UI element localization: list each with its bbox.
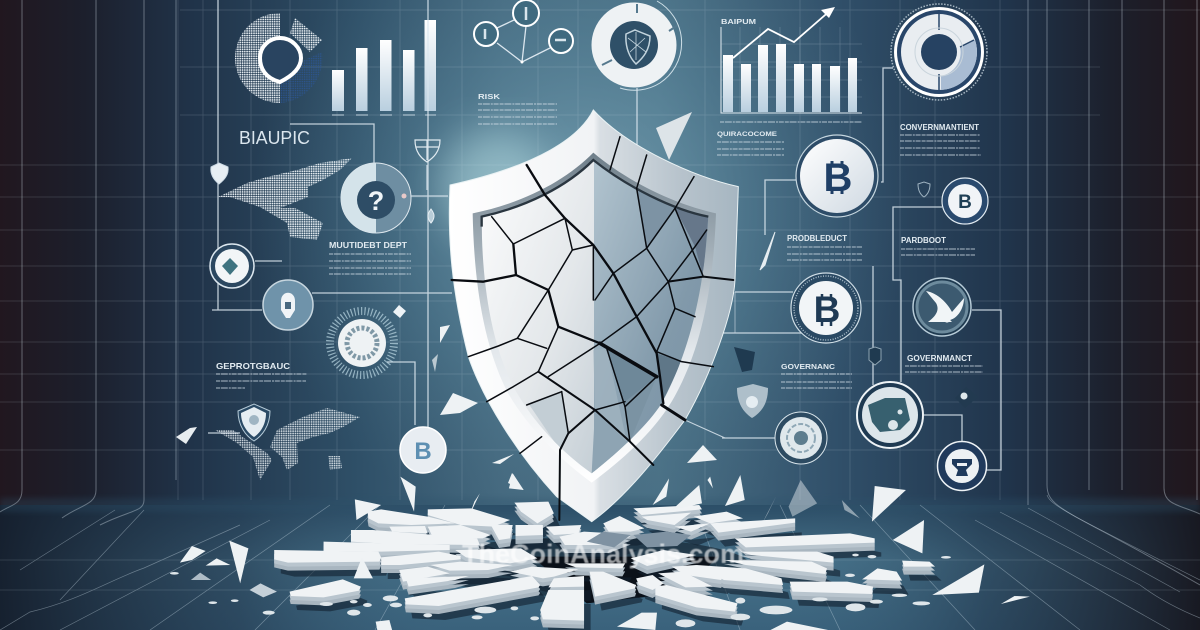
- shards left of shield: [432, 325, 523, 490]
- text block: convernmantient: [900, 122, 981, 155]
- connector lines left: [208, 0, 452, 433]
- icon: navy badge coin: [938, 442, 986, 490]
- icon: small shield left: [211, 163, 228, 184]
- shield cracks: [452, 137, 733, 520]
- world map dots lower: [215, 408, 360, 480]
- heading: BIAUPIC: BIAUPIC: [239, 128, 310, 148]
- debris pile: [170, 473, 1030, 630]
- icon: small drop: [428, 209, 434, 223]
- text block: multidebt: [329, 240, 411, 274]
- icon: big bitcoin coin: B: [824, 156, 852, 200]
- shield inner panel: [482, 162, 708, 474]
- connector lines right: [685, 68, 1001, 470]
- icon: bitcoin coin lower left: [400, 427, 446, 473]
- text block: product left: [787, 234, 862, 260]
- panel: shield donut: [601, 1, 682, 188]
- text block: product left: PRODBLEDUCT: [787, 234, 847, 243]
- shard right of shield: [687, 445, 717, 463]
- text block: multidebt: MUUTIDEBT DEPT: [329, 240, 408, 250]
- grey central shards: [587, 532, 691, 547]
- shield inner shadow: [482, 160, 708, 227]
- icon: small dark shield: [869, 347, 881, 365]
- shield inner bevel: [473, 153, 716, 483]
- text block: left lower: [216, 361, 307, 388]
- world map dots upper: [218, 158, 352, 240]
- icon: shard left: [176, 427, 197, 444]
- text block: government: GOVERNMANCT: [907, 354, 972, 363]
- text block: under chart: QUIRACOCOME: [717, 131, 778, 138]
- shield rim: [449, 110, 738, 522]
- icon: ringed bitcoin coin: [791, 273, 861, 343]
- shard right of shield: [760, 232, 775, 270]
- icon: big bitcoin coin: [796, 135, 878, 217]
- shard near shield top right: [656, 112, 692, 160]
- text block: product right: [901, 236, 975, 255]
- bar chart: top right: BAIPUM: [721, 17, 756, 26]
- text block: governance: [781, 362, 852, 388]
- bar chart: top left: [332, 20, 436, 115]
- pebbles: [170, 554, 951, 627]
- icon: question mark donut: ?: [368, 186, 384, 216]
- text block: risk: RISK: [478, 92, 501, 101]
- bar chart: top right: [720, 7, 862, 122]
- icon: bitcoin coin lower left: B: [414, 438, 432, 465]
- icon: small bitcoin coin: B: [958, 192, 972, 213]
- icon: small bitcoin coin: [942, 178, 988, 224]
- glow behind shield: [440, 130, 550, 240]
- icon: emblem coin: [857, 382, 923, 448]
- icon: glowing shield: [238, 404, 270, 441]
- icon: question mark donut: [341, 163, 411, 233]
- icon: light shield: [737, 384, 768, 418]
- icon: diamond coin: [210, 244, 254, 288]
- icon: dotted badge: [330, 311, 394, 375]
- text block: governance: GOVERNANC: [781, 362, 836, 371]
- icon: small dark gem: [955, 387, 978, 408]
- icon: tiny shield right: [918, 182, 930, 197]
- icon: grey pill coin: [263, 280, 313, 330]
- shield: [449, 110, 738, 522]
- watermark: TheCoinAnalysis.com: [462, 539, 744, 569]
- floor: [0, 495, 1200, 630]
- text block: product right: PARDBOOT: [901, 236, 946, 245]
- text block: risk: [478, 92, 557, 124]
- icon: outline shield top: [415, 140, 440, 162]
- text block: left lower: GEPROTGBAUC: [216, 361, 290, 371]
- icon: dark shard: [734, 347, 755, 372]
- icon: ringed bitcoin coin: B: [814, 289, 840, 330]
- panel: network diagram: [474, 0, 573, 64]
- loose shards: [180, 473, 1030, 630]
- icon: swirl coin: [775, 412, 827, 464]
- icon: big ring donut: [891, 4, 987, 100]
- panel: dotted donut chart: [235, 13, 322, 103]
- icon: small diamond: [393, 305, 406, 318]
- icon: bird coin: [913, 278, 971, 336]
- text block: under chart: [717, 131, 784, 155]
- text block: convernmantient: CONVERNMANTIENT: [900, 122, 980, 132]
- text block: government: [905, 354, 983, 372]
